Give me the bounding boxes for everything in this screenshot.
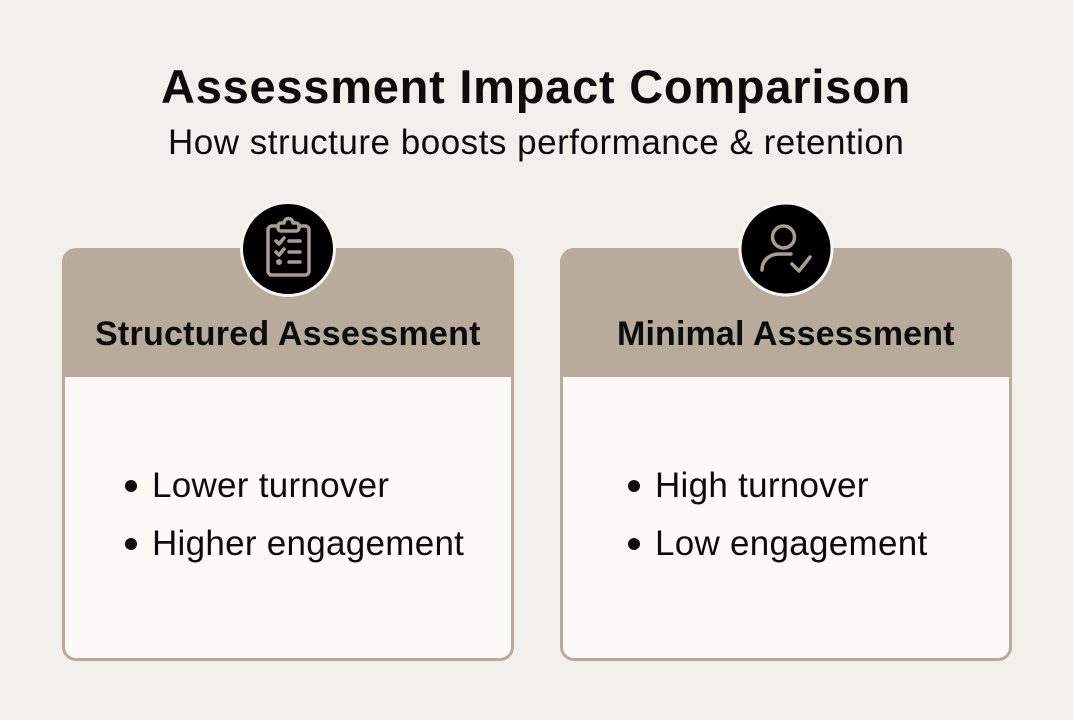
- list: minimal assessment: High turnover: [655, 466, 869, 505]
- icon: clipboard checklist: [240, 204, 336, 297]
- panel: minimal assessment: [560, 248, 1012, 661]
- list: structured assessment: [125, 466, 464, 563]
- panel header: structured assessment: [62, 248, 514, 377]
- list: minimal assessment: [628, 466, 927, 563]
- panel header: minimal assessment: [560, 248, 1012, 377]
- list: structured assessment: Lower turnover: [152, 466, 389, 505]
- panel: structured assessment: [62, 248, 514, 661]
- subtitle: How structure boosts performance & retention: [168, 123, 904, 162]
- list: structured assessment: Higher engagement: [152, 524, 464, 563]
- list: minimal assessment: Low engagement: [655, 524, 927, 563]
- heading: minimal assessment: Minimal Assessment: [617, 315, 955, 353]
- heading: structured assessment: Structured Assessment: [95, 315, 481, 353]
- icon: person with check: [738, 204, 834, 296]
- title: Assessment Impact Comparison: [161, 60, 911, 113]
